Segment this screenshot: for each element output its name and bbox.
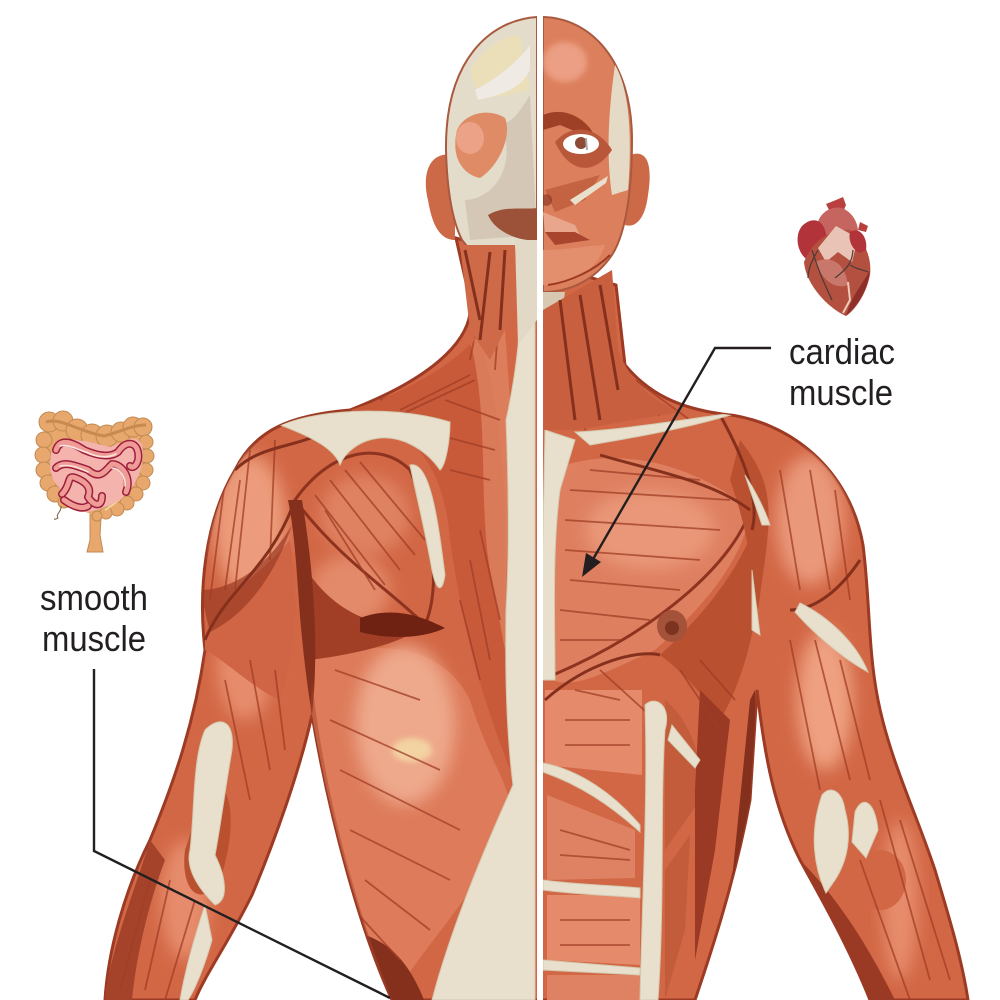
tendons and connective tissue: [180, 290, 878, 1000]
right arm tendons: [795, 603, 868, 672]
dark separation lines: [205, 365, 860, 700]
label: smooth muscle: smooth: [40, 577, 148, 618]
small intestine: [50, 439, 143, 512]
muscle fibre lines: [120, 300, 950, 1000]
label: cardiac muscle: cardiac: [789, 331, 895, 372]
neck, front view: [543, 270, 680, 430]
pointer line: smooth muscle: [94, 669, 390, 998]
nipple: [657, 610, 687, 642]
aorta: [826, 197, 846, 212]
back muscle shading, left half: [105, 330, 510, 1000]
head, back view left half: [426, 17, 537, 262]
right side sternum tendon: [540, 430, 575, 680]
centre dividing line: [537, 15, 543, 1000]
label: cardiac muscle: [789, 331, 895, 413]
right atrium: [849, 230, 866, 253]
spine tendon band: [432, 290, 535, 1000]
large intestine: [35, 411, 154, 552]
head, front view right half: [543, 17, 650, 312]
left elbow tendon: [189, 722, 232, 905]
front muscle shading, right half: [545, 440, 918, 1000]
icon: intestines: [35, 411, 154, 552]
body silhouette: [105, 238, 968, 1000]
linea alba: [640, 701, 667, 1000]
left atrium: [798, 220, 826, 260]
muscular body: [105, 238, 968, 1000]
ventricle: [804, 230, 870, 316]
icon: heart: [798, 197, 870, 316]
trapezius, dark upper back: [350, 335, 510, 770]
left shoulder blade tendon: [280, 411, 450, 470]
arrow: cardiac muscle: [582, 348, 771, 577]
label: smooth muscle: muscle: [42, 618, 146, 659]
neck, back view: [460, 240, 537, 360]
label: smooth muscle: [40, 577, 148, 659]
eye: [563, 134, 599, 154]
label: cardiac muscle: muscle: [789, 372, 893, 413]
